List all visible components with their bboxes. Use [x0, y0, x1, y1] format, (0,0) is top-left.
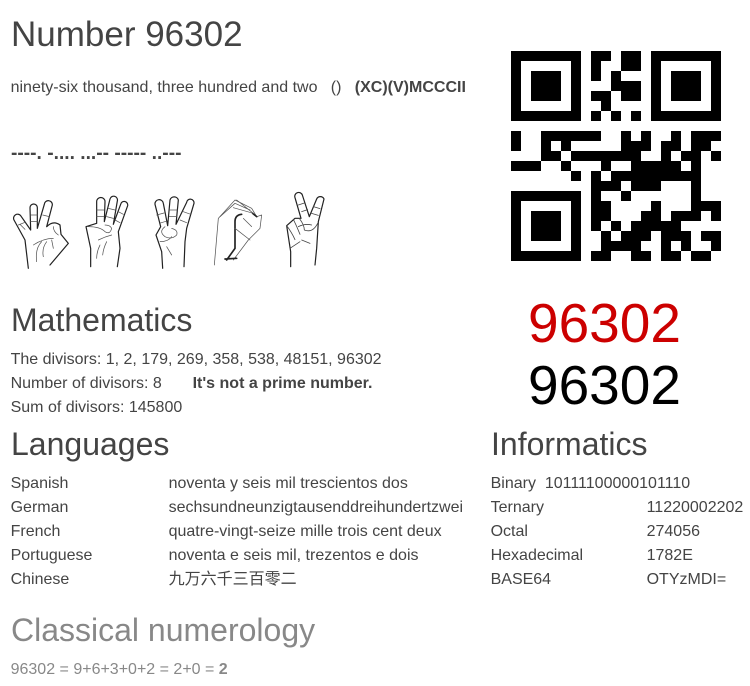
portuguese: Portuguese — [11, 547, 92, 564]
sum of divisors: Sum of divisors: 145800 — [11, 399, 182, 416]
icon: hand 3 — [155, 197, 194, 268]
icon: hand 0 — [214, 200, 262, 265]
hexadecimal: Hexadecimal — [491, 547, 583, 564]
heading: classical numerology: Classical numerology — [11, 612, 315, 648]
chinese: 九万六千三百零二 — [169, 571, 297, 588]
octal: Octal — [491, 523, 528, 540]
portuguese: noventa e seis mil, trezentos e dois — [169, 547, 418, 564]
red number: 96302 — [528, 292, 681, 354]
german: German — [11, 499, 68, 516]
morse code: ----. -.... ...-- ----- ..--- — [11, 143, 181, 164]
chinese: Chinese — [11, 571, 69, 588]
german: sechsundneunzigtausenddreihundertzwei — [169, 499, 463, 516]
heading: languages: Languages — [11, 426, 169, 462]
ternary: Ternary — [491, 499, 544, 516]
french: quatre-vingt-seize mille trois cent deux — [169, 523, 442, 540]
base64: OTYzMDI= — [647, 571, 726, 588]
title: Number 96302 — [11, 15, 243, 54]
languages table — [11, 475, 463, 588]
hexadecimal — [491, 547, 693, 564]
black number: 96302 — [528, 354, 681, 416]
spanish: noventa y seis mil trescientos dos — [169, 475, 408, 492]
heading: mathematics: Mathematics — [11, 302, 192, 338]
base64 — [491, 571, 726, 588]
numerology sum: 96302 = 9+6+3+0+2 = 2+0 = 2 — [11, 661, 228, 678]
prime note: It's not a prime number. — [193, 375, 372, 392]
QR code — [511, 51, 721, 261]
spanish: Spanish — [11, 475, 68, 492]
portuguese — [11, 547, 418, 564]
hexadecimal: 1782E — [647, 547, 693, 564]
octal — [491, 523, 700, 540]
german — [11, 499, 463, 516]
ternary — [491, 499, 743, 516]
spanish — [11, 475, 408, 492]
french: French — [11, 523, 60, 540]
icon: hand 2 — [287, 192, 324, 267]
french — [11, 523, 442, 540]
heading: informatics: Informatics — [491, 426, 647, 462]
mathematics facts — [11, 351, 382, 416]
chinese — [11, 570, 297, 588]
icon: sign language hands — [12, 192, 325, 269]
ternary: 11220002202 — [647, 499, 743, 516]
informatics table — [491, 475, 743, 588]
binary: Binary 10111100000101110 — [491, 475, 690, 492]
icon: hand 6 — [86, 196, 128, 267]
octal: 274056 — [647, 523, 700, 540]
number in words and roman numeral: ninety-six thousand, three hundred and two () (XC)(V)MCCCII — [11, 79, 466, 96]
icon: hand 9 — [14, 201, 68, 268]
number of divisors: Number of divisors: 8 — [11, 375, 162, 392]
divisors: The divisors: 1, 2, 179, 269, 358, 538, 48151, 96302 — [11, 351, 382, 368]
base64: BASE64 — [491, 571, 551, 588]
